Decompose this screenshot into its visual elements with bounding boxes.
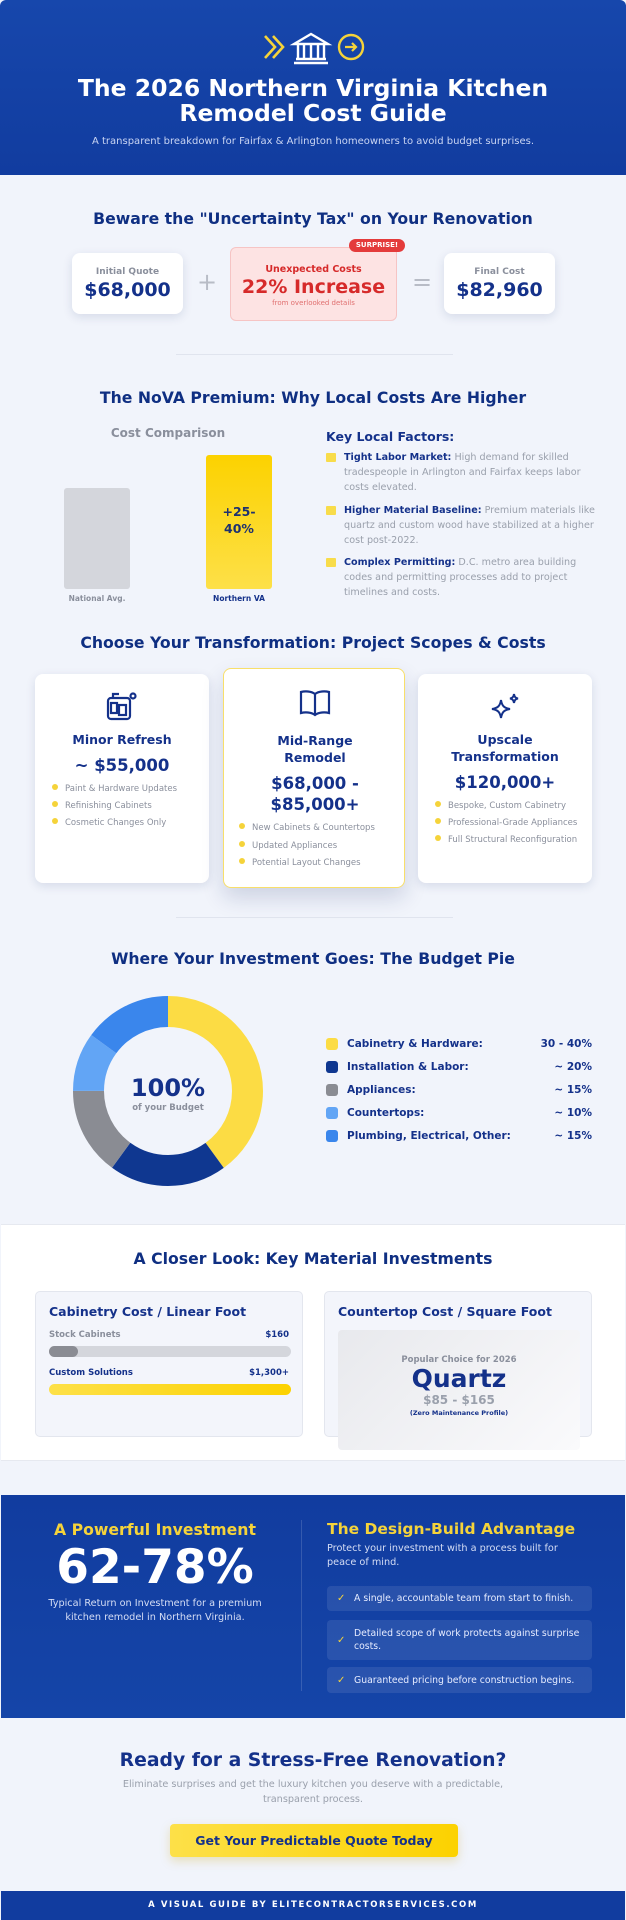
- card: mid-range remodel: Updated Appliances: [252, 840, 337, 850]
- legend: Installation & Labor:: [347, 1061, 469, 1073]
- factor: material: Higher Material Baseline: Premium materials like quartz and custom wood have stabilized at a higher cost post-2022.: [344, 505, 595, 546]
- card: minor refresh: Refinishing Cabinets: [65, 801, 152, 811]
- box: initial quote: $68,000: [84, 279, 171, 301]
- heading: closer look: A Closer Look: Key Material Investments: [134, 1249, 492, 1268]
- donut chart: of your Budget: [132, 1103, 204, 1113]
- legend: Plumbing, Electrical, Other:: [347, 1130, 511, 1142]
- CTA heading: Ready for a Stress-Free Renovation?: [120, 1750, 506, 1771]
- powerful investment: 62-78%: [56, 1540, 254, 1595]
- title: Remodel Cost Guide: [179, 99, 447, 127]
- card: countertop cost: Popular Choice for 2026: [401, 1355, 517, 1365]
- card: cabinetry cost: Stock Cabinets: [49, 1330, 121, 1340]
- card: upscale transformation: Transformation: [451, 749, 559, 764]
- key local factors: Key Local Factors:: [326, 429, 454, 444]
- equals sign: =: [412, 268, 432, 296]
- card: countertop cost: Quartz: [412, 1364, 506, 1393]
- plus sign: +: [197, 268, 217, 296]
- CTA text: [123, 1779, 503, 1805]
- section: material investments: [1, 1224, 625, 1461]
- legend: Countertops:: [347, 1107, 424, 1119]
- card: minor refresh: Minor Refresh: [72, 732, 172, 747]
- card: minor refresh: [35, 674, 209, 883]
- badge: surprise: SURPRISE!: [356, 241, 398, 249]
- factor: labor: Tight Labor Market: High demand for skilled tradespeople in Arlington and Fairfax keeps labor costs elevated.: [344, 452, 581, 493]
- design-build advantage: Protect your investment with a process built for peace of mind.: [327, 1543, 558, 1568]
- powerful investment: [48, 1520, 262, 1623]
- title: The 2026 Northern Virginia Kitchen: [78, 74, 548, 102]
- card: cabinetry cost: $160: [265, 1330, 289, 1340]
- card: cabinetry cost: Custom Solutions: [49, 1368, 133, 1378]
- card: mid-range remodel: Remodel: [284, 750, 346, 765]
- powerful investment: Typical Return on Investment for a premium: [48, 1598, 262, 1609]
- card: upscale transformation: [418, 674, 592, 883]
- CTA text: Eliminate surprises and get the luxury kitchen you deserve with a predictable,: [123, 1779, 503, 1790]
- design-build advantage: [327, 1520, 575, 1568]
- legend: [326, 1038, 592, 1142]
- box: unexpected costs: Unexpected Costs: [265, 264, 362, 275]
- header banner: [0, 0, 626, 175]
- box: unexpected costs: from overlooked details: [272, 299, 355, 307]
- legend: ~ 20%: [554, 1061, 592, 1073]
- donut chart: 100%: [131, 1074, 205, 1102]
- donut chart: [73, 996, 263, 1186]
- box: initial quote: [72, 253, 183, 314]
- legend: Cabinetry & Hardware:: [347, 1038, 483, 1050]
- card: cabinetry cost: $1,300+: [249, 1368, 289, 1378]
- check item 3: [327, 1667, 592, 1693]
- card: minor refresh: ~ $55,000: [75, 756, 169, 775]
- heading: nova premium: The NoVA Premium: Why Local Costs Are Higher: [100, 388, 526, 407]
- box: final cost: $82,960: [456, 279, 543, 301]
- card: minor refresh: Paint & Hardware Updates: [65, 784, 177, 794]
- footer: [1, 1891, 625, 1920]
- check item 1: A single, accountable team from start to finish.: [354, 1593, 573, 1604]
- card: countertop cost: (Zero Maintenance Profile): [410, 1409, 508, 1417]
- card: mid-range remodel: New Cabinets & Countertops: [252, 823, 375, 833]
- heading: uncertainty tax: Beware the "Uncertainty Tax" on Your Renovation: [93, 209, 533, 228]
- design-build advantage: The Design-Build Advantage: [327, 1520, 575, 1538]
- powerful investment: A Powerful Investment: [54, 1520, 256, 1539]
- card: upscale transformation: Bespoke, Custom Cabinetry: [448, 801, 566, 811]
- subtitle: A transparent breakdown for Fairfax & Arlington homeowners to avoid budget surprises.: [92, 136, 534, 147]
- chart: cost comparison: Cost Comparison: [111, 426, 225, 440]
- factor: permitting: Complex Permitting: D.C. metro area building codes and permitting processes add to project timelines and costs.: [344, 557, 576, 598]
- heading: budget pie: Where Your Investment Goes: The Budget Pie: [111, 949, 515, 968]
- CTA text: transparent process.: [263, 1794, 363, 1805]
- chart: cost comparison: [64, 426, 272, 603]
- section: investment & design-build: [1, 1495, 625, 1718]
- card: cabinetry cost: [35, 1291, 303, 1437]
- box: unexpected costs: [230, 247, 397, 321]
- card: mid-range remodel: [223, 668, 405, 888]
- card: upscale transformation: Full Structural Reconfiguration: [448, 835, 577, 845]
- card: cabinetry cost: Cabinetry Cost / Linear Foot: [49, 1304, 246, 1319]
- legend: 30 - 40%: [541, 1038, 592, 1050]
- legend: ~ 15%: [554, 1130, 592, 1142]
- header icons: [264, 32, 364, 64]
- check item 1: [327, 1586, 592, 1611]
- box: final cost: Final Cost: [474, 267, 525, 277]
- chart: cost comparison: +25-: [222, 504, 256, 519]
- card: mid-range remodel: Potential Layout Changes: [252, 858, 361, 868]
- card: minor refresh: Cosmetic Changes Only: [65, 818, 166, 828]
- title: [78, 74, 548, 127]
- check item 2: [327, 1620, 592, 1660]
- legend: ~ 10%: [554, 1107, 592, 1119]
- chart: cost comparison: 40%: [224, 521, 254, 536]
- check item 2: Detailed scope of work protects against surprise costs.: [354, 1628, 579, 1652]
- powerful investment: kitchen remodel in Northern Virginia.: [65, 1612, 245, 1623]
- CTA button: [170, 1824, 458, 1857]
- chart: cost comparison: National Avg.: [69, 594, 125, 603]
- chart: cost comparison: Northern VA: [213, 594, 265, 603]
- card: mid-range remodel: $85,000+: [270, 795, 359, 814]
- card: mid-range remodel: Mid-Range: [277, 733, 353, 748]
- box: unexpected costs: 22% Increase: [242, 276, 385, 298]
- box: final cost: [444, 253, 555, 314]
- card: countertop cost: $85 - $165: [423, 1393, 495, 1407]
- card: upscale transformation: Upscale: [477, 732, 533, 747]
- legend: ~ 15%: [554, 1084, 592, 1096]
- legend: Appliances:: [347, 1084, 416, 1096]
- card: mid-range remodel: $68,000 -: [271, 774, 359, 793]
- card: countertop cost: [324, 1291, 592, 1437]
- check item 3: Guaranteed pricing before construction begins.: [354, 1674, 574, 1686]
- badge: surprise: [349, 239, 405, 252]
- card: countertop cost: Countertop Cost / Square Foot: [338, 1304, 552, 1319]
- card: upscale transformation: $120,000+: [455, 773, 555, 792]
- footer: A VISUAL GUIDE BY ELITECONTRACTORSERVICES.COM: [148, 1900, 478, 1910]
- card: upscale transformation: Professional-Grade Appliances: [448, 818, 577, 828]
- heading: project scopes: Choose Your Transformation: Project Scopes & Costs: [80, 633, 546, 652]
- box: initial quote: Initial Quote: [96, 267, 159, 277]
- CTA button: Get Your Predictable Quote Today: [195, 1833, 433, 1848]
